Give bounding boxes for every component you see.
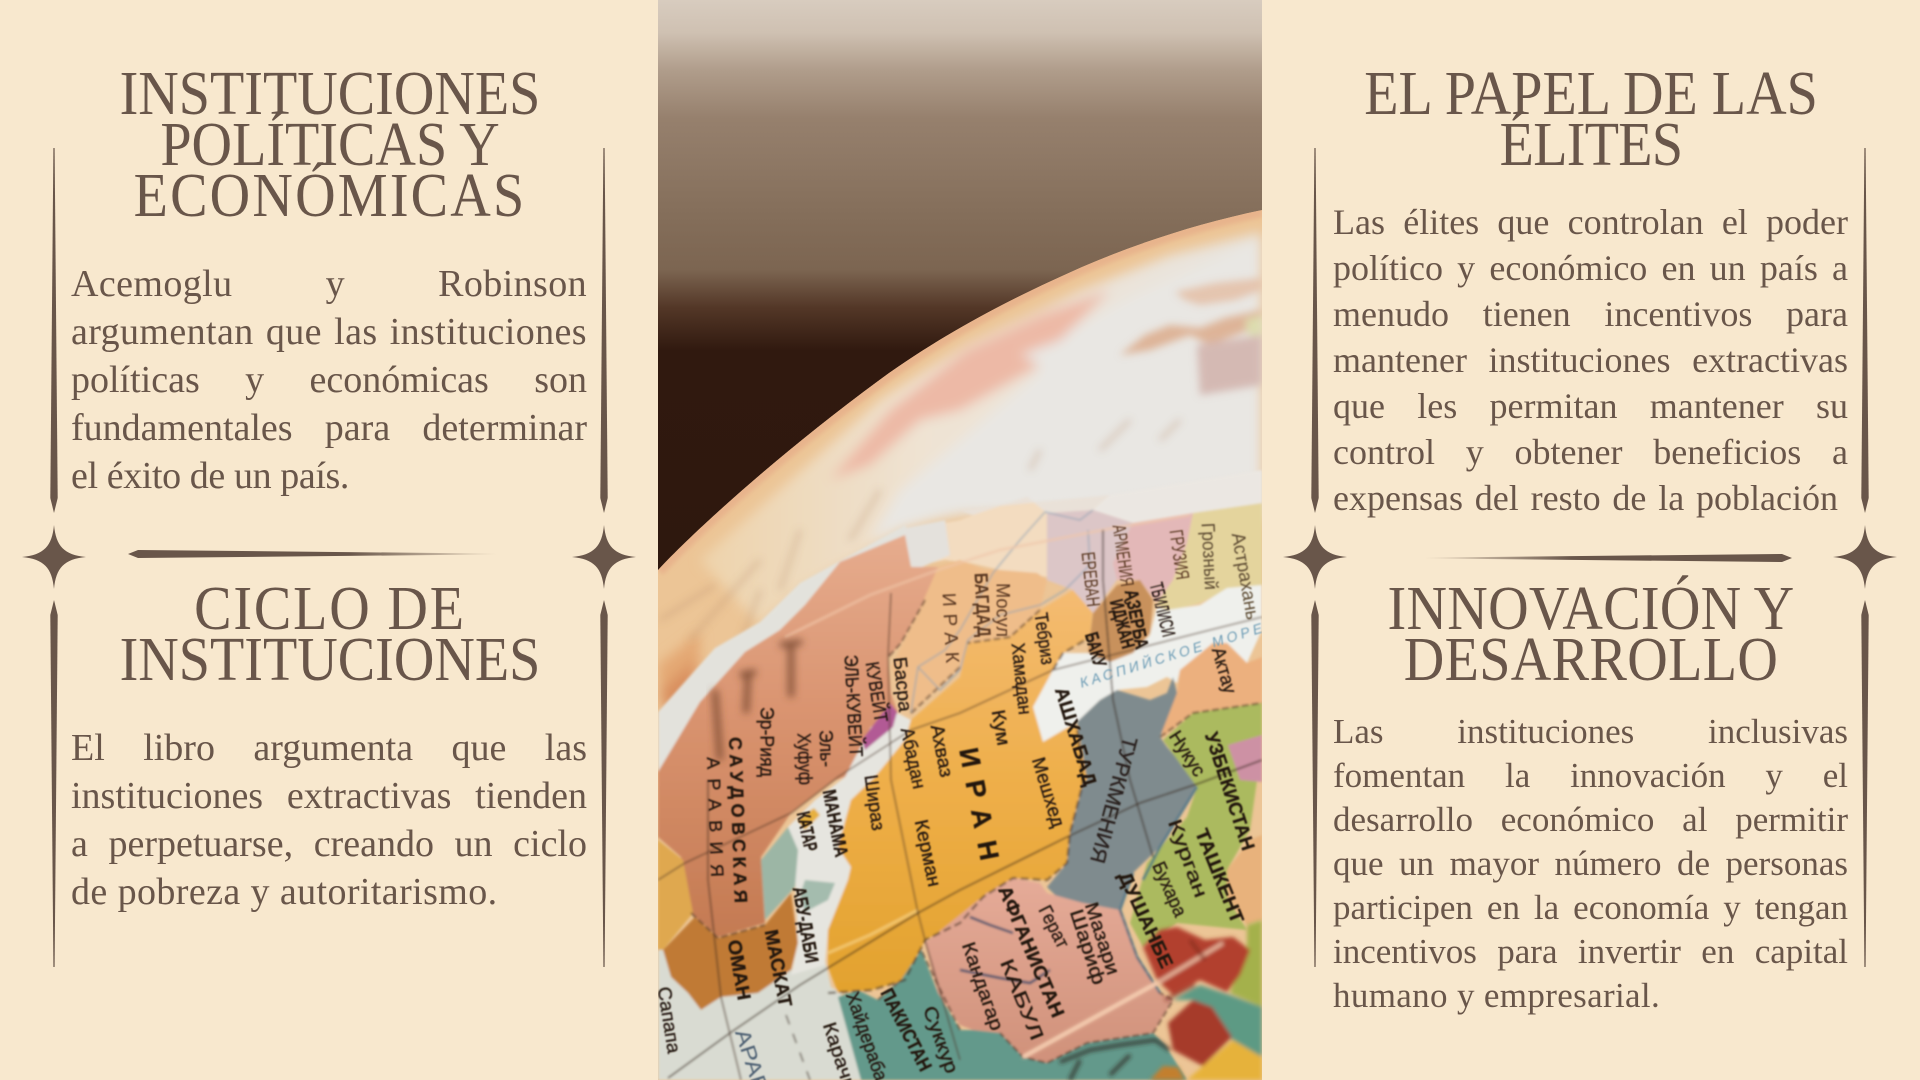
map labels: БАГДАД — [970, 572, 994, 638]
uzbekistan — [1130, 703, 1262, 947]
heading: ciclo de instituciones — [120, 575, 540, 694]
map labels: ДУШАНБЕ — [1113, 869, 1176, 972]
text block: élites: mantener instituciones extractivas — [1333, 340, 1848, 380]
map labels: Бухара — [1147, 859, 1190, 921]
rim shade — [658, 210, 1262, 570]
yemen — [658, 840, 693, 950]
text block: instituciones: argumentan que las instituciones — [71, 310, 587, 352]
caspian — [1033, 585, 1262, 742]
lower right blurred countries — [1023, 920, 1262, 1080]
map labels: Хамадан — [1007, 642, 1035, 716]
ornament frame right — [1283, 148, 1897, 967]
ornament frame left — [22, 148, 636, 967]
iraq — [891, 560, 1047, 713]
map labels: Хуфуф — [793, 733, 815, 785]
syria — [935, 502, 1048, 578]
map labels: АШХАБАД — [1050, 685, 1100, 789]
text block: ciclo — [71, 726, 587, 912]
map labels: Нукус — [1164, 727, 1209, 781]
pakistan/india — [838, 950, 1187, 1080]
kazakhstan — [1160, 643, 1262, 737]
kuwait — [862, 703, 897, 750]
north caucasus — [1157, 503, 1262, 612]
map labels: КАТАР — [792, 810, 821, 854]
pink district — [1228, 735, 1262, 782]
map labels: КУВЕЙТ — [861, 660, 892, 724]
map labels — [653, 522, 1265, 1080]
map labels: БАКУ — [1080, 630, 1110, 670]
dark borders — [828, 637, 1090, 993]
map labels: АРМЕНИЯ — [1108, 524, 1137, 588]
mauve caucasus — [1047, 510, 1133, 613]
heading: instituciones políticas y económicas: ECONÓMICAS — [134, 162, 526, 230]
heading: instituciones políticas y económicas: INSTITUCIONES — [120, 60, 540, 128]
map labels: Курган — [1163, 816, 1211, 901]
text block: innovación: desarrollo económico al permitir — [1333, 800, 1848, 838]
uae — [761, 827, 798, 920]
text block: élites: expensas del resto de la población — [1333, 478, 1838, 518]
text block: innovación: participen en la economía y tengan — [1333, 888, 1848, 926]
map labels: Мешхед — [1027, 755, 1068, 830]
map labels: УЗБЕКИСТАН — [1200, 730, 1258, 853]
text block: instituciones — [71, 262, 587, 496]
map labels: Эль- — [815, 730, 837, 767]
globe surface — [653, 210, 1265, 1080]
map labels: Басра — [889, 656, 915, 713]
blurred desert labels — [715, 642, 802, 760]
heading: el papel de las élites: ÉLITES — [1500, 110, 1682, 178]
creases and graticule — [784, 524, 1134, 638]
map labels: ЙДЖАН — [1105, 597, 1139, 651]
panel: left column — [22, 60, 636, 967]
photo background — [658, 0, 1262, 1080]
heading: el papel de las élites: EL PAPEL DE LAS — [1364, 60, 1818, 128]
map labels: Тебриз — [1030, 612, 1058, 666]
map labels: АРАВИЯ — [703, 757, 727, 877]
map labels: ЭЛЬ-КУВЕЙТ — [840, 654, 867, 758]
afghanistan — [925, 878, 1173, 1063]
turkmenistan — [1047, 677, 1197, 910]
map labels: ГРУЗИЯ — [1165, 529, 1192, 581]
arabian sea — [658, 950, 861, 1080]
saudi arabia — [658, 535, 938, 937]
photo: globe map close-up — [658, 0, 1262, 1080]
text block: élites: político y económico en un país a — [1333, 248, 1848, 288]
map labels: МАСКАТ — [760, 928, 795, 1009]
map labels: ТАШКЕНТ — [1190, 826, 1247, 927]
map labels: Ахваз — [926, 723, 956, 779]
text block: innovación: Las instituciones inclusivas — [1333, 712, 1848, 750]
map labels: САУДОВСКАЯ — [725, 737, 751, 903]
azerbaijan — [1088, 580, 1153, 662]
map labels: АЗЕРБА — [1120, 588, 1152, 651]
map labels: Эр-Рияд — [756, 707, 776, 777]
iran — [828, 590, 1093, 993]
map labels: ОМАН — [723, 938, 754, 1002]
map labels: Актау — [1207, 645, 1240, 697]
heading: innovación y desarrollo: INNOVACIÓN Y — [1388, 575, 1794, 643]
upper blurred details — [660, 278, 1262, 660]
kyrgyz — [1227, 835, 1262, 925]
heading: ciclo de instituciones: INSTITUCIONES — [120, 626, 540, 694]
map labels: КАБУЛ — [995, 956, 1047, 1044]
text block: innovación: que un mayor número de personas — [1333, 844, 1848, 882]
map labels: АФГАНИСТАН — [993, 883, 1068, 1021]
map labels: ИРАК — [938, 592, 962, 663]
map labels: Шариф — [1065, 907, 1109, 987]
upper blurred region — [658, 232, 1262, 715]
text block: instituciones: políticas y económicas son — [71, 358, 587, 400]
text block: élites: control y obtener beneficios a — [1333, 432, 1848, 472]
map labels: Абадан — [896, 726, 929, 791]
map labels: ТУРКМЕНИЯ — [1085, 734, 1141, 866]
map labels: Суккур — [918, 1003, 962, 1076]
oman — [663, 893, 798, 1010]
text block: élites: menudo tienen incentivos para — [1333, 294, 1848, 334]
map labels: Керман — [910, 818, 944, 889]
map labels: Герат — [1034, 902, 1073, 952]
heading: innovación y desarrollo — [1388, 575, 1794, 694]
heading: el papel de las élites — [1364, 60, 1818, 178]
heading: ciclo de instituciones: CICLO DE — [194, 575, 466, 643]
map labels: МАНАМА — [818, 788, 851, 859]
map countries — [658, 470, 1262, 1080]
text block: élites: Las élites que controlan el poder — [1333, 202, 1848, 242]
persian gulf — [788, 713, 911, 975]
text block: instituciones: el éxito de un país. — [71, 454, 349, 496]
map labels: ИРАН — [953, 745, 1004, 863]
mediterranean — [658, 525, 910, 772]
map labels: КАСПИЙСКОЕ МОРЕ — [1077, 619, 1262, 691]
text block: ciclo: de pobreza y autoritarismo. — [71, 870, 498, 912]
text block: innovación: humano y empresarial. — [1333, 976, 1660, 1014]
rivers — [911, 510, 1093, 712]
text block: élites: que les permitan mantener su — [1333, 386, 1848, 426]
text block: innovación — [1333, 712, 1848, 1014]
text block: ciclo: a perpetuarse, creando un ciclo — [71, 822, 587, 864]
text block: innovación: incentivos para invertir en capital — [1333, 932, 1848, 970]
map labels: ТБИЛИСИ — [1145, 580, 1178, 639]
heading: instituciones políticas y económicas — [120, 60, 540, 230]
heading: innovación y desarrollo: DESARROLLO — [1404, 626, 1778, 694]
map labels: АБУ-ДАБИ — [788, 885, 822, 965]
map labels: Мосул — [992, 583, 1012, 637]
georgia — [1113, 513, 1193, 603]
map labels: Грозный — [1197, 522, 1221, 590]
text block: instituciones: fundamentales para determinar — [71, 406, 587, 448]
map labels: Кандагар — [957, 940, 1007, 1033]
map labels: ЕРЕВАН — [1077, 551, 1103, 608]
heading: instituciones políticas y económicas: POLÍTICAS Y — [160, 110, 500, 178]
map labels: Шираз — [860, 774, 888, 832]
map labels: Мазари — [1080, 900, 1123, 978]
panel: right column — [1283, 60, 1897, 1014]
text block: instituciones: Acemoglu y Robinson — [71, 262, 587, 304]
text block: innovación: fomentan la innovación y el — [1333, 756, 1848, 794]
map labels: Кум — [987, 708, 1014, 747]
text block: élites — [1333, 202, 1848, 518]
text block: ciclo: El libro argumenta que las — [71, 726, 587, 768]
text block: ciclo: instituciones extractivas tienden — [71, 774, 587, 816]
